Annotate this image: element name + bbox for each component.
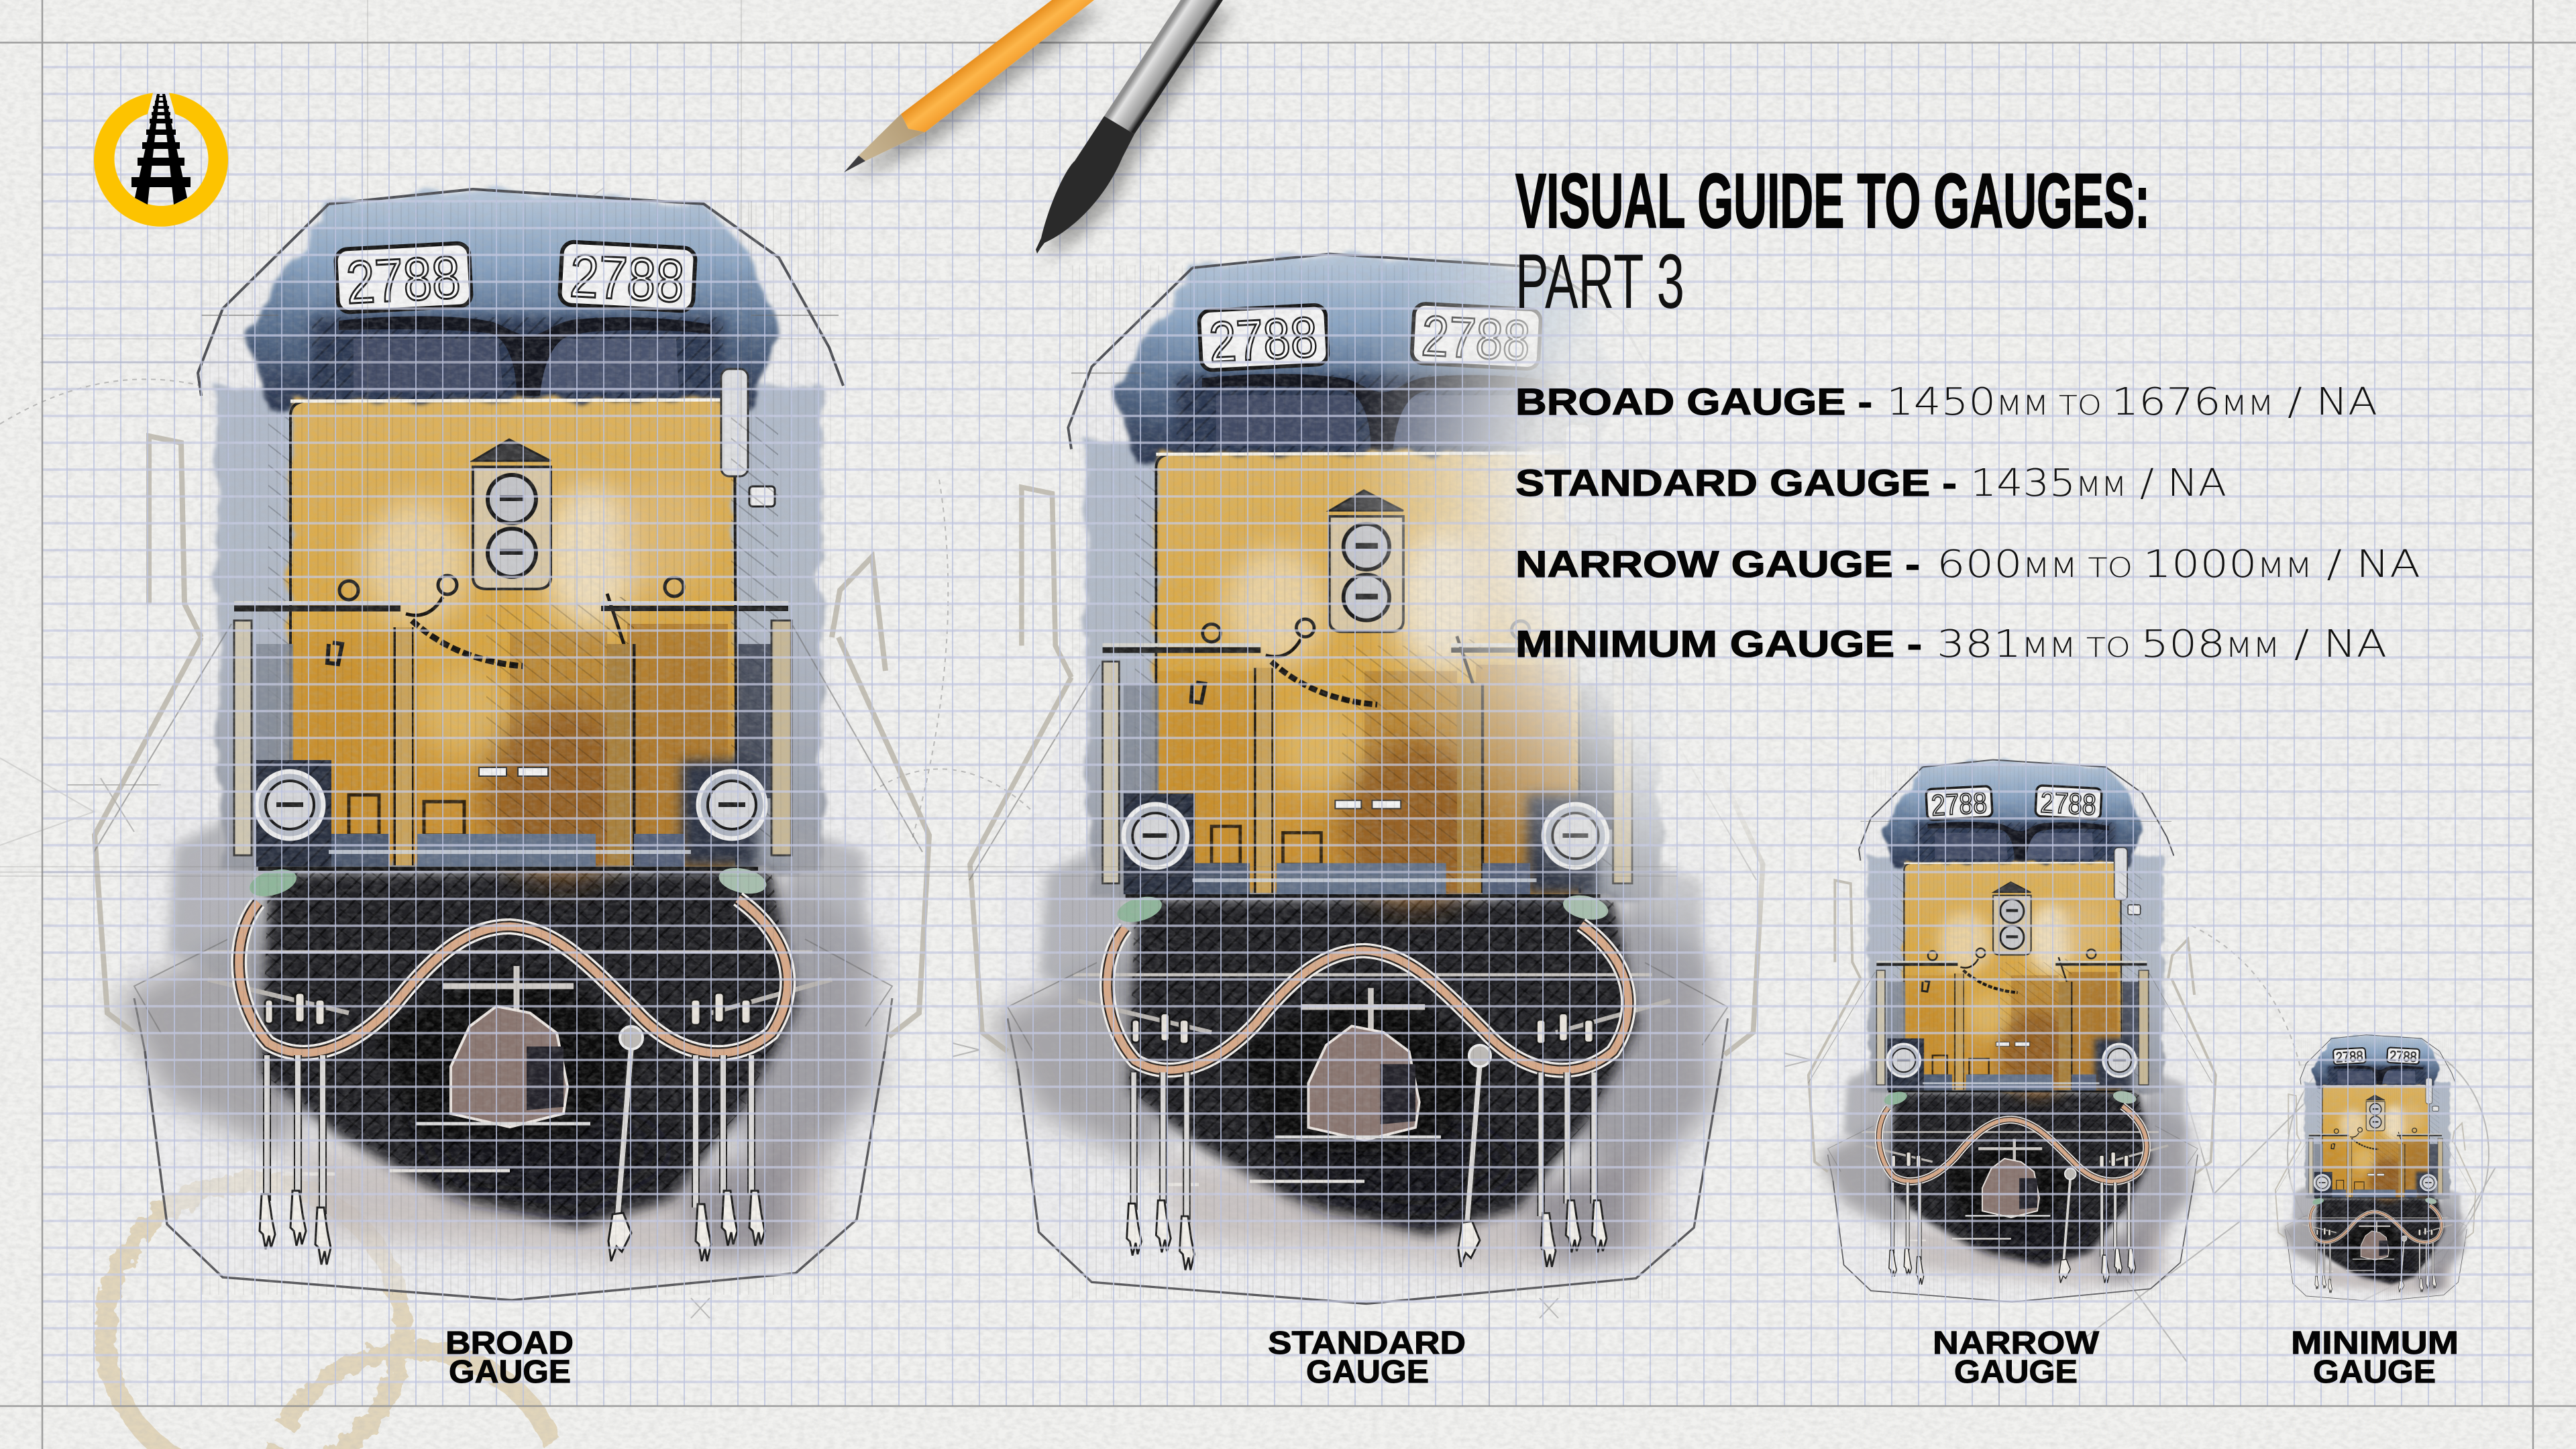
label: standard gauge: STANDARD (1268, 1326, 1466, 1361)
number plates: 2788 (2389, 1047, 2417, 1065)
label: narrow gauge: GAUGE (1954, 1354, 2078, 1390)
number plates: 2788 (345, 244, 462, 317)
row: narrow gauge (1515, 543, 2420, 586)
sketch construction lines (0, 188, 2496, 1362)
row: narrow gauge: 600 MM TO 1000 MM / NA (1937, 543, 2420, 586)
locomotive: standard gauge (969, 254, 1763, 1303)
row: narrow gauge: NARROW GAUGE - (1515, 543, 1920, 585)
number plates: 2788 (1931, 786, 1988, 822)
subtitle: PART 3 (1515, 239, 1684, 325)
label: minimum gauge: MINIMUM (2291, 1326, 2459, 1361)
gauge list (1515, 380, 2420, 666)
coffee stain rings (105, 1182, 564, 1449)
number plates (2333, 1047, 2420, 1066)
title (1515, 158, 2150, 325)
number plates (1199, 303, 1541, 375)
icon: pen (1036, 0, 1223, 254)
number plates: 2788 (2335, 1047, 2363, 1066)
row: standard gauge (1515, 462, 2226, 505)
locomotive: narrow gauge (1808, 760, 2216, 1302)
locomotive: minimum gauge (2275, 1035, 2475, 1301)
row: minimum gauge: 381 MM TO 508 MM / NA (1937, 623, 2387, 666)
row: standard gauge: STANDARD GAUGE - (1515, 462, 1957, 504)
icon: pencil (844, 0, 1094, 172)
icon: track (131, 94, 191, 205)
label: broad gauge (445, 1326, 574, 1390)
row: broad gauge: BROAD GAUGE - (1515, 380, 1872, 423)
logo: railway track in yellow ring (94, 93, 228, 227)
fade behind title text (1308, 0, 2576, 1006)
locomotive: broad gauge (94, 189, 929, 1300)
row: minimum gauge: MINIMUM GAUGE - (1515, 623, 1922, 665)
label: narrow gauge: NARROW (1933, 1326, 2100, 1361)
label: broad gauge: BROAD (445, 1326, 574, 1361)
row: broad gauge: 1450 MM TO 1676 MM / NA (1886, 380, 2377, 424)
number plates (1926, 786, 2102, 822)
label: minimum gauge (2291, 1326, 2459, 1390)
number plates: 2788 (1420, 305, 1532, 374)
row: broad gauge (1515, 380, 2377, 424)
label: narrow gauge (1933, 1326, 2100, 1390)
label: broad gauge: GAUGE (449, 1354, 571, 1390)
label: standard gauge: GAUGE (1306, 1354, 1429, 1390)
label: minimum gauge: GAUGE (2313, 1354, 2436, 1390)
number plates (335, 241, 696, 317)
number plates: 2788 (568, 243, 686, 315)
title: VISUAL GUIDE TO GAUGES: (1515, 158, 2150, 244)
number plates: 2788 (1208, 305, 1319, 374)
row: minimum gauge (1515, 623, 2387, 666)
label: standard gauge (1268, 1326, 1466, 1390)
number plates: 2788 (2039, 786, 2097, 822)
row: standard gauge: 1435 MM / NA (1970, 462, 2226, 505)
